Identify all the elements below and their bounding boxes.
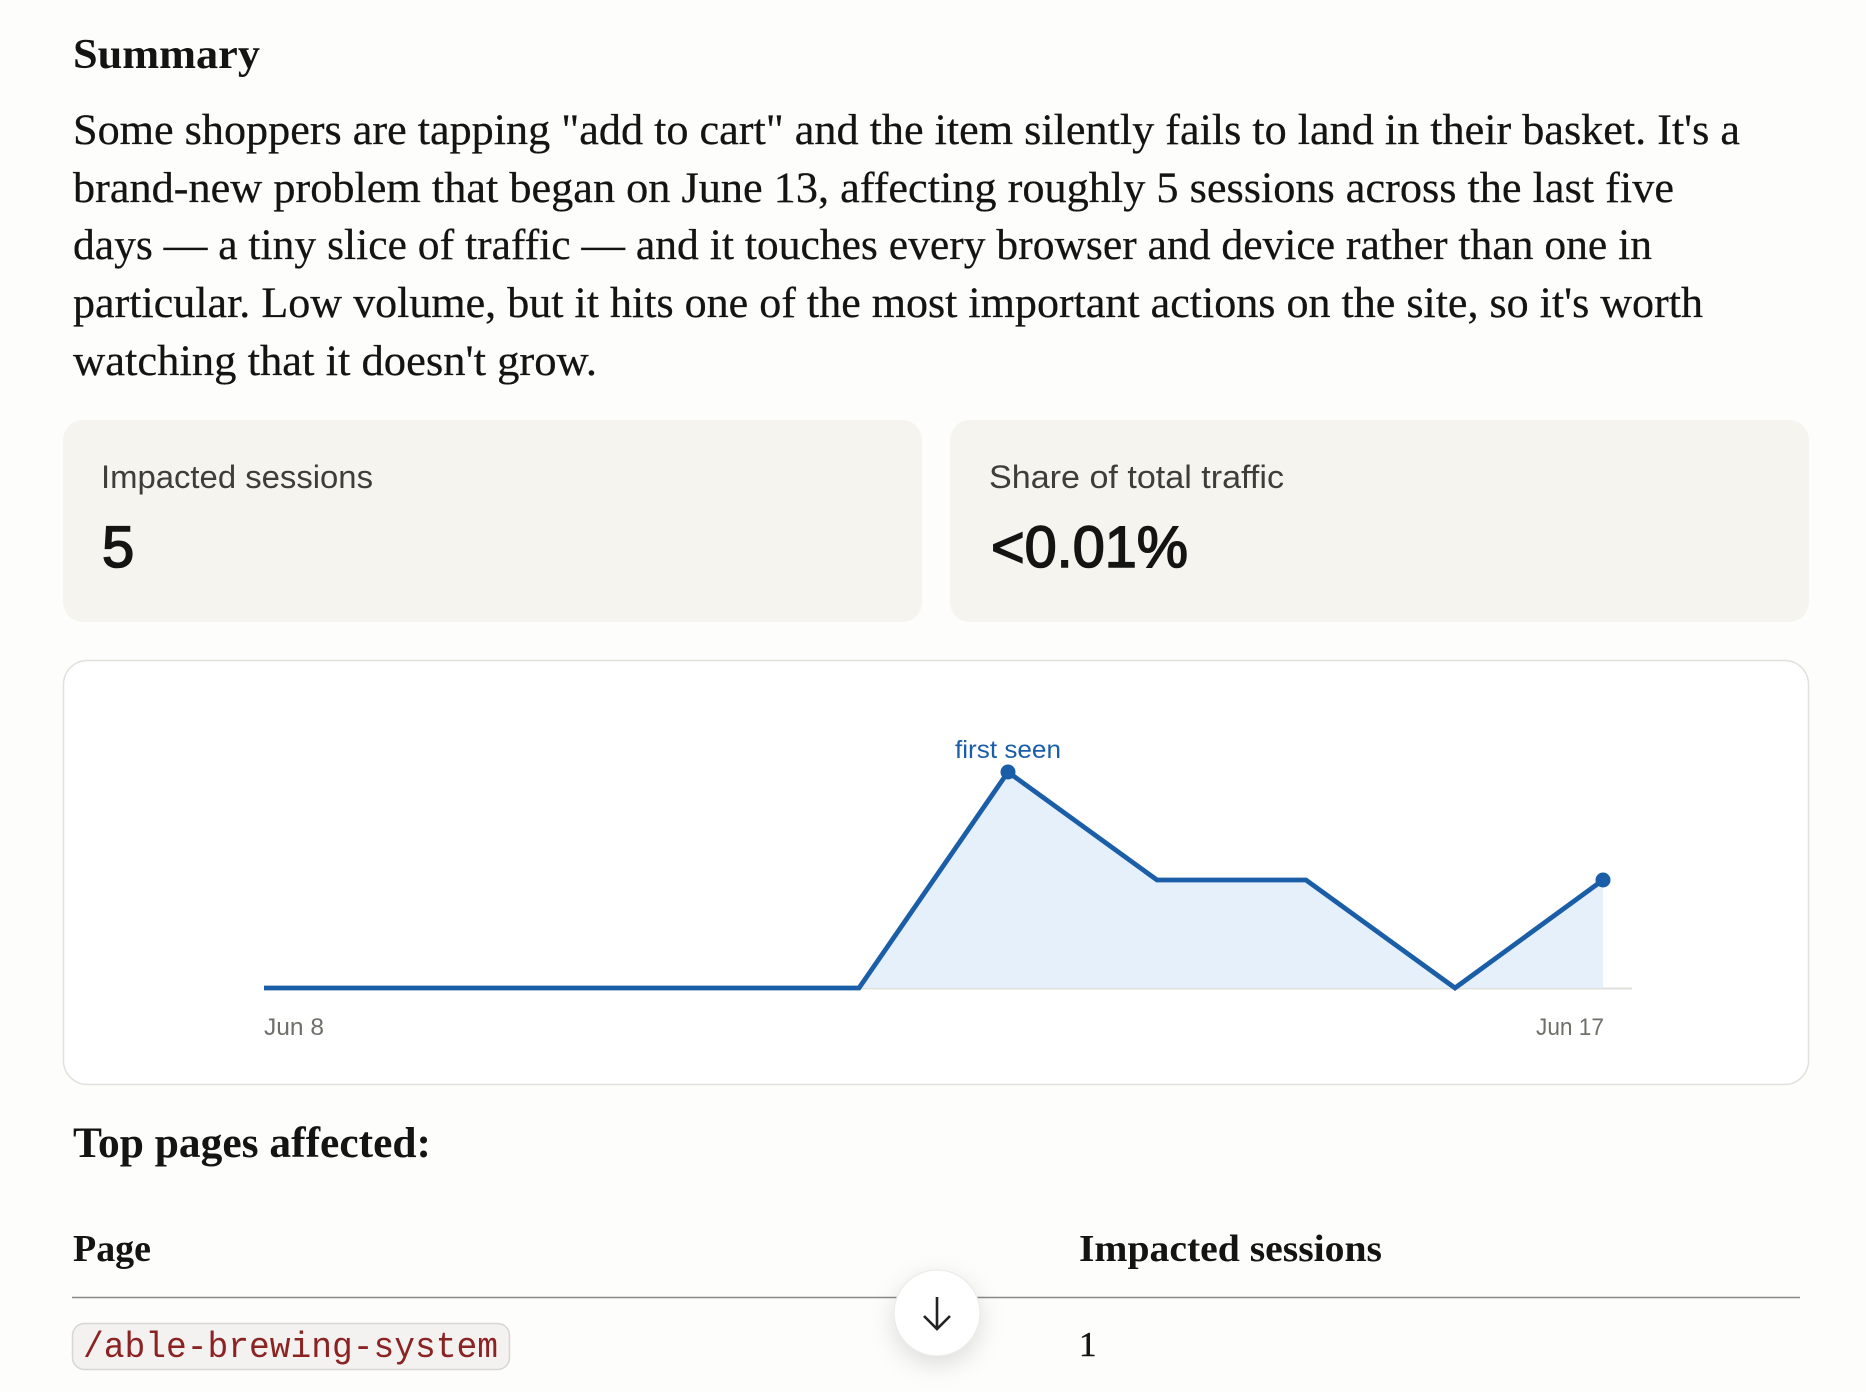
panel: impacted sessions stat card (63, 420, 922, 622)
label: Jun 17: Jun 17 (1536, 1014, 1604, 1041)
heading: Top pages affected: Top pages affected: (73, 1120, 431, 1167)
text block: summary paragraph: brand-new problem that began on June 13, affecting roughly 5 sessions across the last five (73, 165, 1674, 212)
heading: Summary: Summary (73, 32, 260, 78)
text block: summary paragraph: particular. Low volume, but it hits one of the most important actions on the site, so it's worth (73, 280, 1703, 327)
code pill: page path: /able-brewing-system (83, 1327, 498, 1368)
panel: impacted sessions stat card: 5 (102, 515, 134, 580)
area fill (859, 772, 1603, 988)
column header: Impacted sessions: Impacted sessions (1079, 1228, 1382, 1270)
label: Jun 8: Jun 8 (264, 1014, 324, 1041)
marker: first seen (1000, 764, 1016, 780)
panel: share of total traffic stat card: Share of total traffic (989, 459, 1284, 495)
icon: scroll down button (894, 1270, 980, 1356)
table (72, 1228, 1800, 1370)
panel: impacted sessions stat card: Impacted sessions (101, 459, 373, 495)
cell: session count: 1 (1079, 1325, 1096, 1364)
text block: summary paragraph: days — a tiny slice of traffic — and it touches every browser and device rather than one in (73, 222, 1652, 269)
axis baseline (264, 988, 1632, 990)
panel: share of total traffic stat card: <0.01% (991, 515, 1188, 580)
column header: Page: Page (73, 1228, 151, 1270)
text block: summary paragraph (73, 107, 1740, 385)
panel: share of total traffic stat card (950, 420, 1809, 622)
line series (264, 772, 1603, 988)
text block: summary paragraph: Some shoppers are tapping "add to cart" and the item silently fails to land in their basket. It's a (73, 107, 1740, 154)
marker: latest (1596, 872, 1610, 888)
text block: summary paragraph: watching that it doesn't grow. (73, 338, 597, 385)
panel: chart (64, 660, 1808, 1084)
label: first seen: first seen (955, 736, 1061, 764)
